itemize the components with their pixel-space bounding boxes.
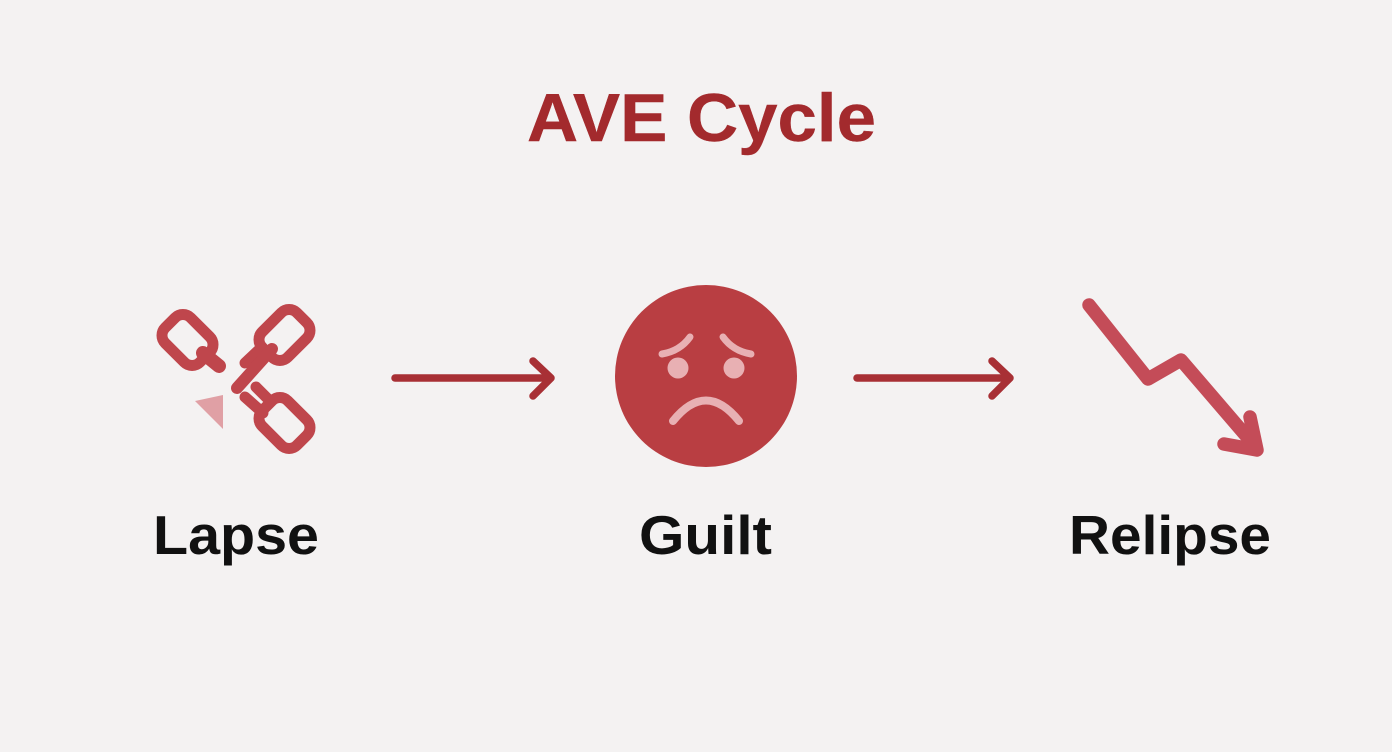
label: Lapse: Lapse [153, 504, 319, 566]
icon: sad face [615, 285, 797, 467]
title: AVE Cycle [527, 80, 876, 156]
arrow: lapse to guilt [395, 361, 551, 396]
icon: broken chain [157, 305, 315, 453]
label: Guilt: Guilt [639, 504, 772, 566]
arrow: guilt to relapse [857, 361, 1010, 396]
icon: downward zigzag arrow [1089, 305, 1257, 450]
label: Relipse: Relipse [1069, 504, 1271, 566]
